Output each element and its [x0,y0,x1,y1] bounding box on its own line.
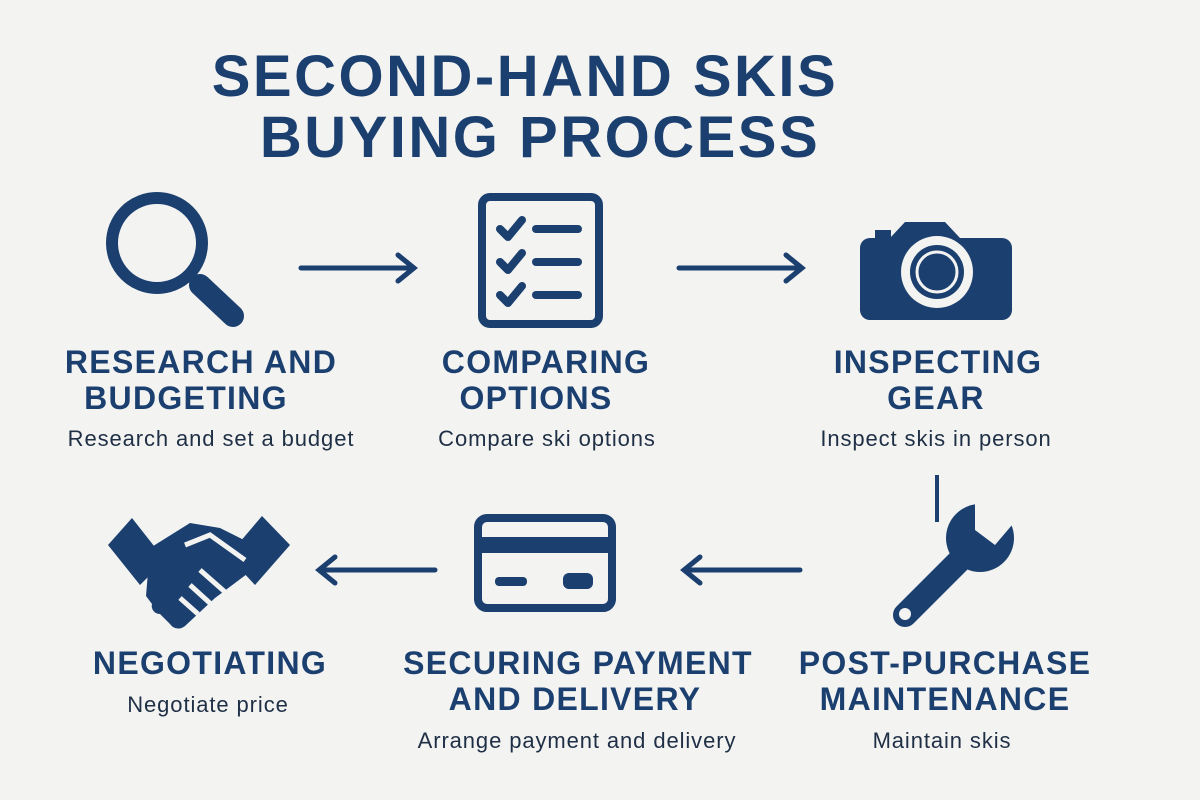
heading: negotiating: NEGOTIATING [93,645,327,681]
heading: securing payment: AND DELIVERY [449,681,701,717]
heading: comparing: OPTIONS [459,380,613,416]
arrow 4 [684,557,800,583]
heading: securing payment: SECURING PAYMENT [403,645,753,681]
icon: wrench [899,500,1014,620]
heading: securing payment: Arrange payment and delivery [418,728,736,753]
heading: inspecting [820,344,1052,451]
arrow 3 [319,557,435,583]
heading: post-purchase [799,645,1091,753]
heading: negotiating [93,645,327,717]
title [212,44,838,170]
heading: post-purchase: MAINTENANCE [820,681,1070,717]
title: BUYING PROCESS [260,105,820,170]
arrow 2 [679,255,802,281]
heading: research: Research and set a budget [68,426,354,451]
heading: post-purchase: Maintain skis [873,728,1011,753]
heading: research: RESEARCH AND [65,344,337,380]
arrow 1 [301,255,414,281]
heading: inspecting: GEAR [887,380,985,416]
icon: handshake [108,516,290,629]
heading: securing payment [403,645,753,753]
heading: comparing [438,344,656,451]
heading: research [65,344,354,451]
heading: comparing: COMPARING [442,344,650,380]
heading: post-purchase: POST-PURCHASE [799,645,1091,681]
icon: credit card [478,518,612,608]
heading: research: BUDGETING [84,380,288,416]
heading: negotiating: Negotiate price [127,692,289,717]
heading: inspecting: Inspect skis in person [820,426,1052,451]
icon: camera [860,222,1012,320]
icon: magnifier [112,198,233,316]
connector vertical [935,475,939,522]
heading: inspecting: INSPECTING [834,344,1042,380]
icon: checklist [482,197,599,324]
heading: comparing: Compare ski options [438,426,656,451]
title: SECOND-HAND SKIS [212,44,838,109]
